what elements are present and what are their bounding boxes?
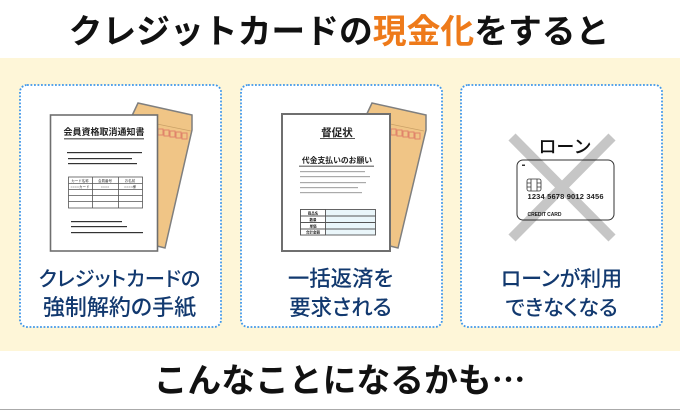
- title: クレジットカードの現金化をすると: [69, 13, 609, 51]
- credit card: [517, 160, 614, 220]
- caption: 要求される: [289, 296, 392, 320]
- caption: 強制解約の手紙: [43, 295, 196, 320]
- table: 会員番号: [98, 178, 112, 183]
- document heading: 会員資格取消通知書: [63, 126, 145, 137]
- loan label: ローン: [538, 137, 592, 157]
- table: ○○○○カード: [71, 184, 90, 189]
- table: [300, 210, 376, 235]
- panel: demand letter: [241, 85, 442, 327]
- footer text: こんなことになるかも…: [154, 353, 525, 402]
- document: demand: [282, 114, 390, 251]
- document heading: 督促状: [321, 126, 353, 139]
- table: [68, 177, 142, 208]
- table: 単価: [310, 224, 317, 228]
- credit card: 1234 5678 9012 3456: [528, 192, 604, 201]
- panel: cancellation notice: [20, 85, 221, 327]
- table: カード名称: [71, 178, 89, 183]
- table: 合計金額: [306, 230, 320, 234]
- table: 数量: [310, 217, 317, 222]
- table: ○○○○様: [124, 184, 136, 189]
- caption: できなくなる: [505, 297, 618, 320]
- document: notice: [50, 115, 158, 251]
- caption: クレジットカードの: [39, 268, 200, 291]
- caption: ローンが利用: [501, 268, 622, 291]
- table: ○○○○: [101, 185, 109, 189]
- icon: cross mark: [512, 137, 612, 238]
- credit card: CREDIT CARD: [528, 212, 562, 218]
- chip: [527, 179, 541, 191]
- background band: [0, 58, 680, 351]
- table: 商品名: [308, 210, 319, 216]
- document subheading: 代金支払いのお願い: [302, 155, 372, 165]
- icon: envelope: [130, 103, 192, 248]
- table: お名前: [125, 178, 136, 183]
- panel: no loans: [461, 85, 662, 327]
- caption: 一括返済を: [288, 267, 393, 291]
- icon: envelope: [364, 103, 426, 248]
